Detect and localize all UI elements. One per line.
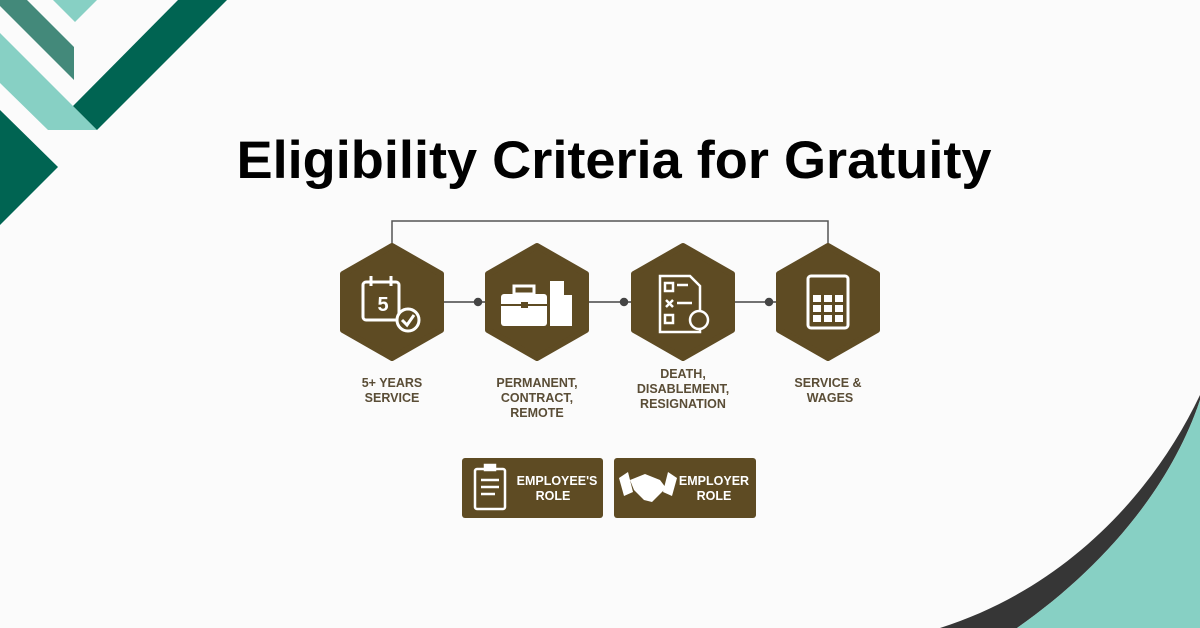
label: SERVICE & — [794, 376, 862, 390]
label: PERMANENT, — [496, 376, 578, 390]
hexagon 3: death disablement resignation — [634, 246, 732, 411]
label: RESIGNATION — [640, 397, 726, 411]
hexagon 4: service & wages — [779, 246, 877, 405]
icon: calendar with check: 5 — [377, 294, 389, 316]
icon: briefcase and building — [501, 281, 572, 326]
bracket connector — [392, 221, 828, 246]
icon: calendar with check — [363, 276, 419, 331]
button: employer role: EMPLOYER — [679, 474, 749, 488]
title: Eligibility Criteria for Gratuity — [236, 131, 992, 190]
button: employer role: ROLE — [697, 489, 731, 503]
label: DEATH, — [660, 367, 706, 381]
icon: document with checklist and person — [660, 276, 708, 332]
hexagon 1: 5+ years service — [343, 246, 441, 405]
label: 5+ YEARS — [362, 376, 422, 390]
button: employee's role: ROLE — [536, 489, 570, 503]
label: DISABLEMENT, — [637, 382, 729, 396]
decoration: bottom-right curve — [940, 395, 1200, 628]
icon: calculator — [808, 276, 848, 328]
connectors between hexagons — [444, 298, 776, 306]
icon: handshake — [619, 472, 677, 502]
label: REMOTE — [510, 406, 564, 420]
button: employee's role: EMPLOYEE'S — [517, 474, 597, 488]
hexagon 2: permanent contract remote — [488, 246, 586, 420]
button: employee's role — [462, 458, 603, 518]
icon: clipboard — [475, 465, 505, 509]
label: CONTRACT, — [501, 391, 573, 405]
decoration: top-left stripes — [0, 0, 227, 225]
button: employer role — [614, 458, 756, 518]
label: WAGES — [807, 391, 853, 405]
label: SERVICE — [365, 391, 419, 405]
